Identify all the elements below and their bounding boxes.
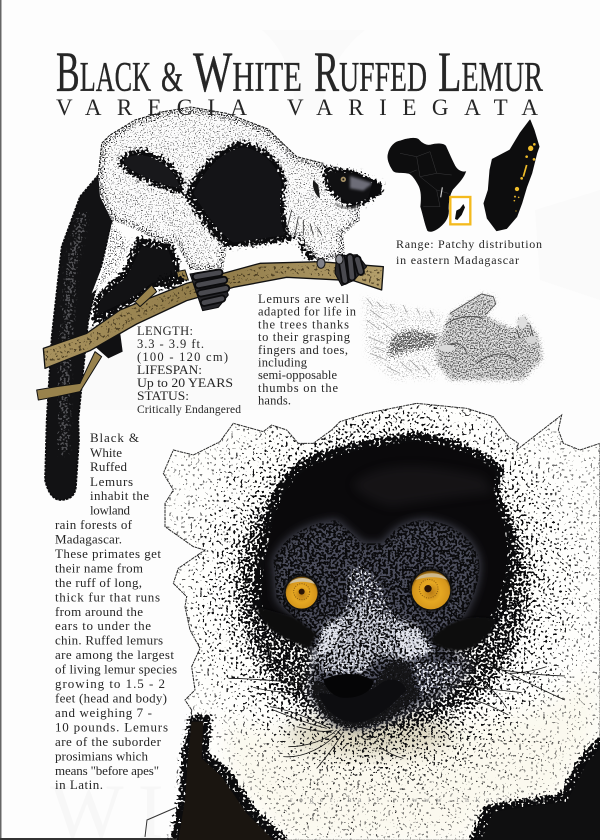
main description text: of living lemur species xyxy=(55,662,177,676)
artist credit: roger hall • www.inkart.net xyxy=(290,795,546,804)
title xyxy=(56,41,543,104)
big lemur portrait xyxy=(145,400,600,840)
main description text: the ruff of long, xyxy=(55,575,142,590)
hand adaptation text xyxy=(258,292,357,408)
stats block: STATUS: xyxy=(137,389,189,403)
main description text: lowland xyxy=(90,502,130,518)
white fur by leg xyxy=(92,223,130,293)
lemur on branch illustration xyxy=(37,107,383,500)
hand adaptation text: hands. xyxy=(258,394,291,408)
stats block xyxy=(137,324,241,416)
main description text: White xyxy=(90,445,122,460)
stats block: 3.3 - 3.9 ft. xyxy=(137,337,204,351)
main description text: Ruffed xyxy=(90,459,128,474)
main description text: growing to 1.5 - 2 xyxy=(55,676,165,691)
hand adaptation text: thumbs on the xyxy=(258,381,338,395)
stats block: LENGTH: xyxy=(137,324,193,338)
hind foot xyxy=(153,272,187,290)
subtitle: scientific name: VARECIA xyxy=(56,95,247,120)
stipple halo xyxy=(150,400,600,840)
main description text: inhabit the xyxy=(90,488,149,503)
muzzle xyxy=(310,661,422,728)
rear hand gripping branch xyxy=(190,269,228,311)
left eye xyxy=(283,574,320,611)
main description text: means "before apes" xyxy=(55,763,159,778)
title: LEMUR xyxy=(438,41,543,104)
stats block: Up to 20 YEARS xyxy=(137,376,233,390)
lemur tail xyxy=(45,175,113,500)
main description text: chin. Ruffed lemurs xyxy=(55,632,163,648)
main description text: in Latin. xyxy=(55,777,103,792)
main description text xyxy=(55,430,177,792)
main description text: These primates get xyxy=(55,546,161,561)
hand adaptation text: adapted for life in xyxy=(258,305,357,319)
title: RUFFED xyxy=(314,41,427,104)
title: WHITE xyxy=(193,41,302,104)
main description text: prosimians which xyxy=(55,748,148,764)
main description text: Lemurs xyxy=(90,474,133,489)
subtitle: scientific name xyxy=(56,95,538,120)
stipple right of muzzle xyxy=(413,663,467,695)
subtitle: scientific name: VARIEGATA xyxy=(287,95,538,120)
ruff outline xyxy=(163,403,600,840)
range caption: in eastern Madagascar xyxy=(396,253,519,267)
shoulder outline xyxy=(145,807,177,837)
small lemur head xyxy=(313,167,382,208)
range caption xyxy=(396,237,542,267)
right eye xyxy=(409,568,453,612)
hand adaptation text: fingers and toes, xyxy=(258,343,348,357)
stats block: (100 - 120 cm) xyxy=(137,350,228,364)
main description text: feet (head and body) xyxy=(55,690,167,706)
whiskers xyxy=(228,630,565,768)
main description text: are among the largest xyxy=(55,647,174,662)
hand fur xyxy=(363,297,443,380)
cream neck glow xyxy=(227,667,597,840)
main branch xyxy=(43,262,383,368)
front hand gripping branch xyxy=(317,255,367,286)
right shoulder xyxy=(467,723,600,840)
stats block: Critically Endangered xyxy=(137,404,241,416)
forehead sheen xyxy=(353,466,493,507)
main description text: and weighing 7 - xyxy=(55,705,152,720)
main description text: 10 pounds. Lemurs xyxy=(55,720,168,734)
main description text: Madagascar. xyxy=(55,532,122,546)
hand adaptation text: the trees thanks xyxy=(258,317,349,331)
black saddle patch xyxy=(183,142,320,260)
head xyxy=(251,432,517,651)
white cheek right xyxy=(393,627,433,660)
map: Madagascar with range xyxy=(484,120,539,231)
range caption: Range: Patchy distribution xyxy=(396,237,542,251)
title: & xyxy=(161,55,183,101)
hand adaptation text: semi-opposable xyxy=(258,368,337,382)
light base on muzzle and cheeks xyxy=(315,600,433,673)
main description text: rain forests of xyxy=(55,517,133,532)
map: Africa xyxy=(388,138,466,231)
hind foot below branch xyxy=(95,332,123,358)
light bridge of muzzle xyxy=(313,566,433,673)
stipple on white fur xyxy=(92,223,130,293)
map: locator box xyxy=(450,197,470,224)
face xyxy=(263,513,483,733)
dark hind leg xyxy=(92,237,183,327)
rump patch core xyxy=(123,155,180,188)
main description text: from around the xyxy=(55,604,143,619)
black saddle core xyxy=(193,147,285,243)
hand adaptation text: to their grasping xyxy=(258,330,351,344)
hand palm and fingers xyxy=(435,294,543,380)
nose xyxy=(323,674,374,698)
main description text: ears to under the xyxy=(55,618,151,633)
main description text: are of the suborder xyxy=(55,734,162,749)
olive shadow beneath chin xyxy=(287,713,453,753)
left shoulder xyxy=(170,715,290,840)
neck fur dotted rays xyxy=(263,733,563,837)
main description text: their name from xyxy=(55,560,143,576)
main description text: thick fur that runs xyxy=(55,590,160,604)
hand adaptation text: Lemurs are well xyxy=(258,292,350,306)
lemur body xyxy=(98,107,382,270)
hand adaptation text: including xyxy=(258,356,308,370)
branch twig by foot xyxy=(135,270,188,307)
dark under-eye right xyxy=(430,617,497,651)
title: BLACK xyxy=(56,41,151,104)
lower branch xyxy=(37,352,102,400)
main description text: Black & xyxy=(90,430,139,445)
hand illustration xyxy=(363,294,543,380)
dark under-eye left xyxy=(257,607,317,648)
white cheek left xyxy=(315,617,345,662)
rump patch xyxy=(118,149,184,195)
neck ruff hairs xyxy=(287,210,322,235)
stats block: LIFESPAN: xyxy=(137,363,202,377)
range maps xyxy=(388,120,539,231)
head core xyxy=(262,442,507,640)
